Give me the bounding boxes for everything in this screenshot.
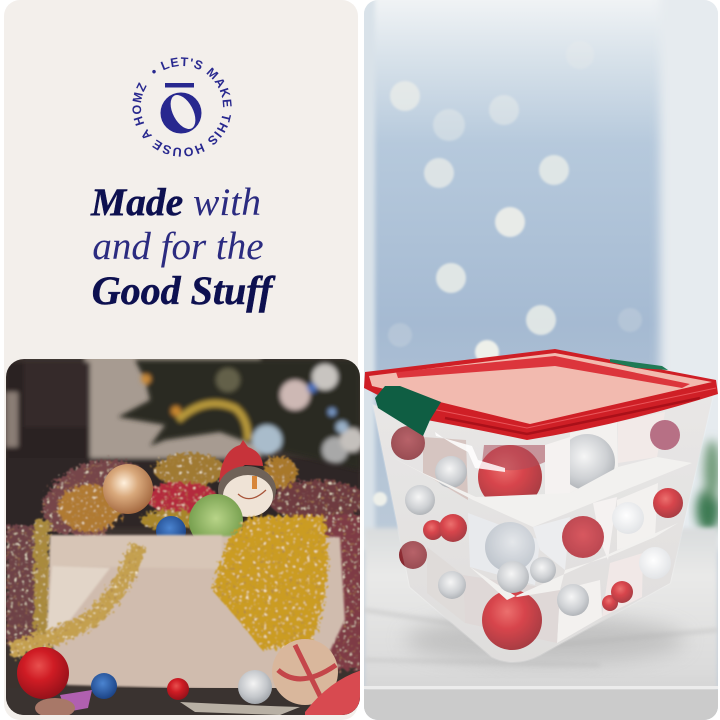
- dividers behind ornaments: [423, 412, 665, 643]
- ornament: gold bauble: [103, 464, 153, 514]
- bin shadow: [405, 616, 685, 664]
- translucent bin front: [374, 404, 683, 663]
- shelves: [388, 455, 692, 600]
- ornaments: middle layer: [405, 485, 683, 572]
- room background: [0, 355, 365, 720]
- green handle clip back: [610, 359, 668, 370]
- ornament: blue and green baubles: [156, 516, 186, 536]
- tinsel mound behind box: [6, 453, 368, 670]
- cardboard dividers in front of ornaments: [533, 437, 570, 570]
- snowman ornament: [218, 440, 276, 517]
- bin handle: [435, 432, 505, 472]
- blurred Christmas tree: [118, 360, 364, 470]
- bin body: [373, 395, 713, 662]
- blurred plant: [696, 440, 720, 532]
- heading line 2: and for the: [92, 225, 264, 268]
- storage bin: [364, 349, 718, 662]
- logo: circular badge: [132, 57, 232, 157]
- ornaments: top layer: [391, 420, 680, 497]
- blurred window backdrop: [355, 0, 720, 720]
- red lid: [364, 349, 718, 440]
- ornament: red glitter bauble: [562, 516, 604, 558]
- heading: Made with and for the Good Stuff: [90, 180, 276, 313]
- logo mark: ring letter o: [160, 91, 202, 134]
- green handle clip front: [375, 386, 441, 436]
- logo ring text: • LET'S MAKE THIS HOUSE A HOMZ: [132, 57, 232, 157]
- marble table: [364, 528, 718, 720]
- photo: box of Christmas decorations: [0, 355, 368, 720]
- heading line 1: Made with: [90, 180, 261, 224]
- gold tinsel garland: [10, 516, 328, 650]
- ornaments in the foreground: [0, 639, 365, 720]
- ornaments: bottom layer: [399, 541, 671, 650]
- photo: window scene with plastic ornament storage bin: [355, 0, 720, 720]
- panel: logo and headline card: [4, 0, 358, 720]
- logo mark: macron bar: [165, 83, 194, 88]
- cardboard box: [47, 535, 345, 692]
- bokeh lights: [373, 41, 642, 506]
- silver cluster on the middle shelf: [497, 557, 556, 593]
- heading line 3: Good Stuff: [92, 268, 276, 313]
